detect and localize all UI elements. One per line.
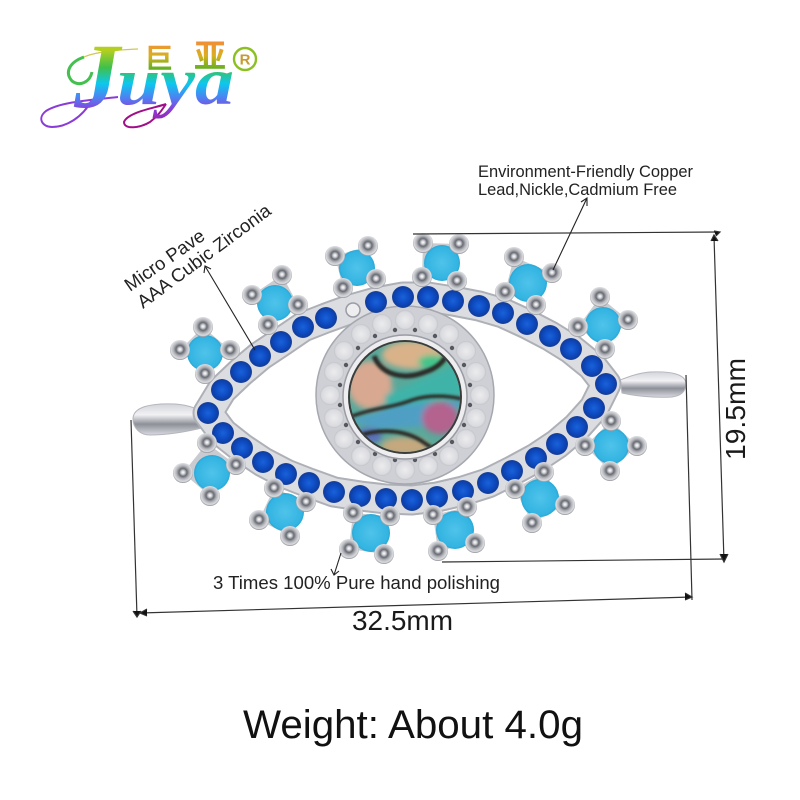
side loop right: [620, 372, 686, 397]
abalone shell inlay: [350, 342, 460, 452]
callout: polishing: 3 Times 100% Pure hand polishing: [213, 572, 500, 593]
text: 19.5mm: 19.5mm: [720, 358, 751, 460]
text: 32.5mm: 32.5mm: [352, 605, 453, 636]
callout: zirconia: AAA Cubic Zirconia: [133, 199, 275, 312]
eye band: [208, 297, 606, 500]
turquoise flowers with prongs: [170, 233, 647, 564]
callout: copper: Lead,Nickle,Cadmium Free: [478, 181, 677, 199]
logo: Juya: uya: [117, 43, 234, 119]
callout: zirconia: Micro Pave: [120, 225, 208, 295]
blue stones: [197, 286, 617, 511]
callout: zirconia: [120, 199, 275, 350]
callout: polishing: [213, 553, 500, 593]
jump ring on band: [346, 303, 360, 317]
dimension: 19.5mm height lines: [413, 231, 728, 562]
logo: Juya: J: [73, 25, 123, 127]
callout: copper: [478, 163, 694, 270]
text: weight: Weight: About 4.0g: [243, 703, 583, 747]
dimension: 32.5mm width lines: [131, 375, 692, 617]
logo: Juya: 亚: [194, 31, 226, 77]
centre disc with pave stones: [316, 306, 494, 484]
side loop left: [133, 404, 208, 435]
logo: Juya: R: [240, 52, 251, 68]
callout: copper: Environment-Friendly Copper: [478, 163, 694, 181]
logo: Juya: [41, 25, 256, 127]
logo: Juya: 巨: [145, 37, 173, 77]
